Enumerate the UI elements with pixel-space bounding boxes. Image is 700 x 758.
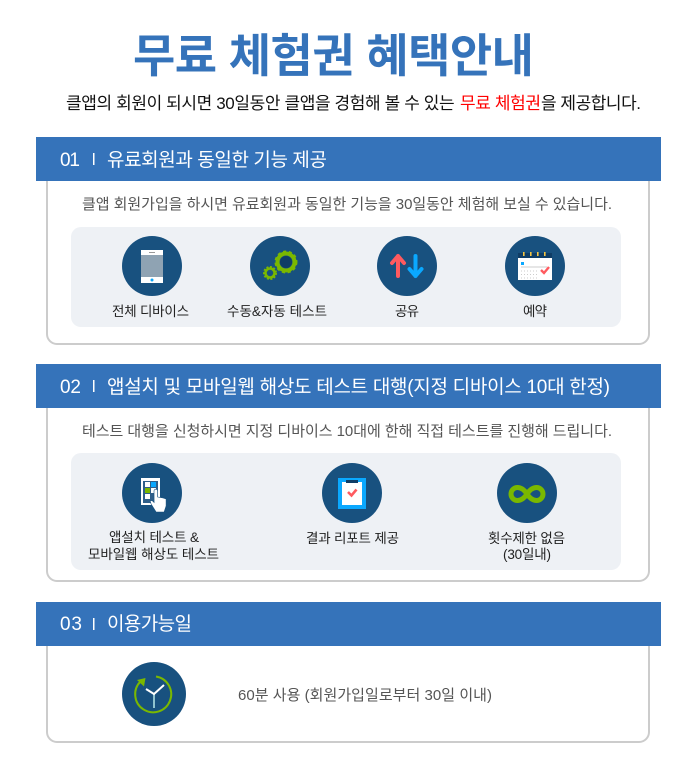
subtitle text block: 클앱의 회원이 되시면 30일동안 클앱을 경험해 볼 수 있는 [66,94,459,113]
section 02 header [36,364,661,408]
icon: calendar [505,236,565,296]
icon: report clipboard [322,463,382,523]
feature panel 02 [71,453,621,570]
label: all devices: 전체 디바이스 [112,304,189,319]
panel: section 03 [36,602,661,742]
section 03 header [36,602,661,646]
icon: app test touch [122,463,182,523]
label: share: 공유 [395,304,419,319]
icon: device [122,236,182,296]
section 01 header: 01 [60,150,80,171]
label: app install and mobile web test [88,530,219,562]
label: app install and mobile web test: 모바일웹 해상도 테스트 [88,547,219,562]
label: reservation: 예약 [523,304,547,319]
section 03 text: 60분 사용 (회원가입일로부터 30일 이내) [238,687,492,704]
subtitle text block: 을 제공합니다. [541,94,641,113]
section 02 description: 테스트 대행을 신청하시면 지정 디바이스 10대에 한해 직접 테스트를 진행해 드립니다. [82,423,612,440]
section 03 header: 이용가능일 [107,613,192,635]
icon: share arrows [377,236,437,296]
panel: section 02 [36,364,661,581]
section 01 header: 유료회원과 동일한 기능 제공 [107,149,327,171]
icon: infinity [497,463,557,523]
section 02 header: 앱설치 및 모바일웹 해상도 테스트 대행(지정 디바이스 10대 한정) [107,376,610,398]
subtitle text block [66,94,641,113]
label: result report: 결과 리포트 제공 [306,531,399,546]
title: 무료 체험권 혜택안내 [133,30,534,82]
label: unlimited count [488,531,565,562]
icon: gears [250,236,310,296]
label: unlimited count: 횟수제한 없음 [488,531,565,546]
section 01 description: 클앱 회원가입을 하시면 유료회원과 동일한 기능을 30일동안 체험해 보실 수 있습니다. [82,196,612,213]
label: manual and automated test: 수동&자동 테스트 [227,304,327,319]
section 01 header [36,137,661,181]
section 03 header: 03 [60,614,82,635]
subtitle text block: 무료 체험권 [460,94,541,113]
feature panel 01 [71,227,621,327]
panel: section 01 [36,137,661,344]
label: unlimited count: (30일내) [503,547,551,562]
icon: clock [122,662,186,726]
section 02 header: 02 [60,377,81,398]
label: app install and mobile web test: 앱설치 테스트 & [109,530,199,545]
